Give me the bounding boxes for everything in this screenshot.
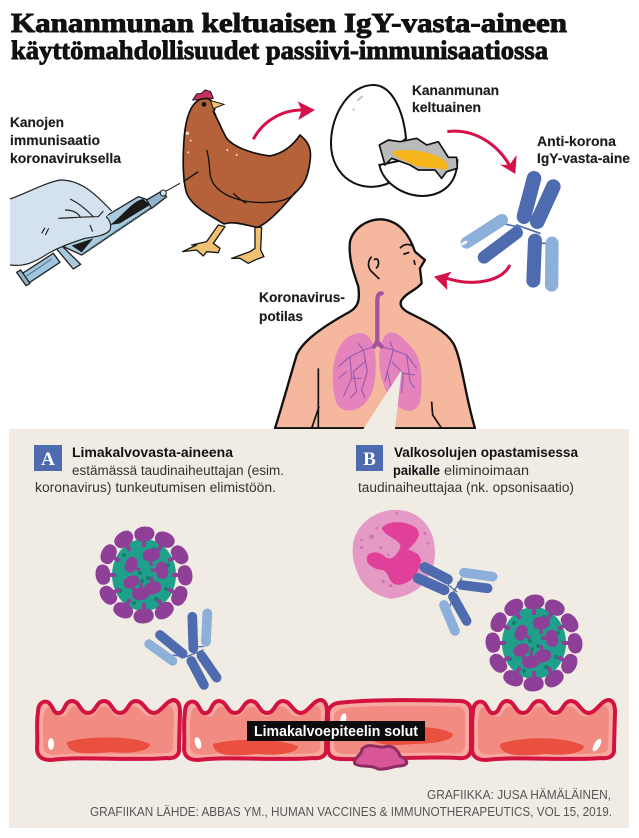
icon: hen [183,90,311,263]
hen body [183,98,311,227]
cell 1 [37,700,180,760]
cell 4 [472,700,615,760]
text block A [35,445,284,495]
icon: coronavirus B [486,594,582,692]
title [11,8,567,65]
label: egg yolk [412,82,499,115]
arrow: hen to egg [253,101,315,139]
badge A [34,445,62,471]
title: Kananmunan keltuaisen IgY-vasta-aineen [11,8,567,38]
label: patient: potilas [259,308,303,324]
icon: patient with lungs [275,219,475,429]
text block B: eliminoimaan [444,463,529,478]
cell 3 [328,700,471,759]
credits: GRAFIIKKA: JUSA HÄMÄLÄINEN, [427,787,611,802]
label: antibody [537,133,630,166]
text block A: estämässä taudinaiheuttajan (esim. [72,463,284,478]
icon: gloved hand with syringe [10,180,180,286]
arrow: antibody to patient [434,265,510,290]
lungs [333,332,422,411]
hen comb and wattle [193,90,216,121]
label: immunisation: immunisaatio [10,132,100,148]
icon: antibody B [418,567,493,631]
badge B: B [363,449,376,470]
label: immunisation: Kanojen [10,114,64,130]
callout wedge [363,370,402,429]
label: antibody: Anti-korona [537,133,616,149]
label: patient: Koronavirus- [259,289,345,305]
label: egg yolk: Kananmunan [412,82,499,98]
text block B: taudinaiheuttajaa (nk. opsonisaatio) [358,480,574,495]
cell 2 [184,700,327,760]
text block B: paikalle [393,463,440,478]
pathogen blob on cell [354,746,407,769]
credits [90,787,612,819]
title: käyttömahdollisuudet passiivi-immunisaatiossa [11,35,548,65]
text block A: Limakalvovasta-aineena [72,445,233,460]
text block B [358,445,578,495]
label: egg yolk: keltuainen [412,99,481,115]
epithelial cells [37,700,615,760]
icon: white blood cell [353,510,435,599]
label: epithelial cells: Limakalvoepiteelin solut [254,724,418,740]
label: immunisation: koronaviruksella [10,150,121,166]
text block B: Valkosolujen opastamisessa [394,445,578,460]
icon: cracked egg with yolk [331,85,457,196]
badge A: A [41,449,55,470]
arrow: egg to antibody [447,131,517,174]
icon: large IgY antibody [463,178,553,285]
text block A: koronavirus) tunkeutumisen elimistöön. [35,480,276,495]
label: patient [259,289,345,324]
icon: coronavirus A [96,526,192,624]
label: antibody: IgY-vasta-aine [537,150,630,166]
label: immunisation [10,114,121,166]
icon: antibody A [149,613,217,685]
badge B [356,445,383,471]
hen legs [183,225,264,263]
panel: mechanisms [9,429,629,828]
